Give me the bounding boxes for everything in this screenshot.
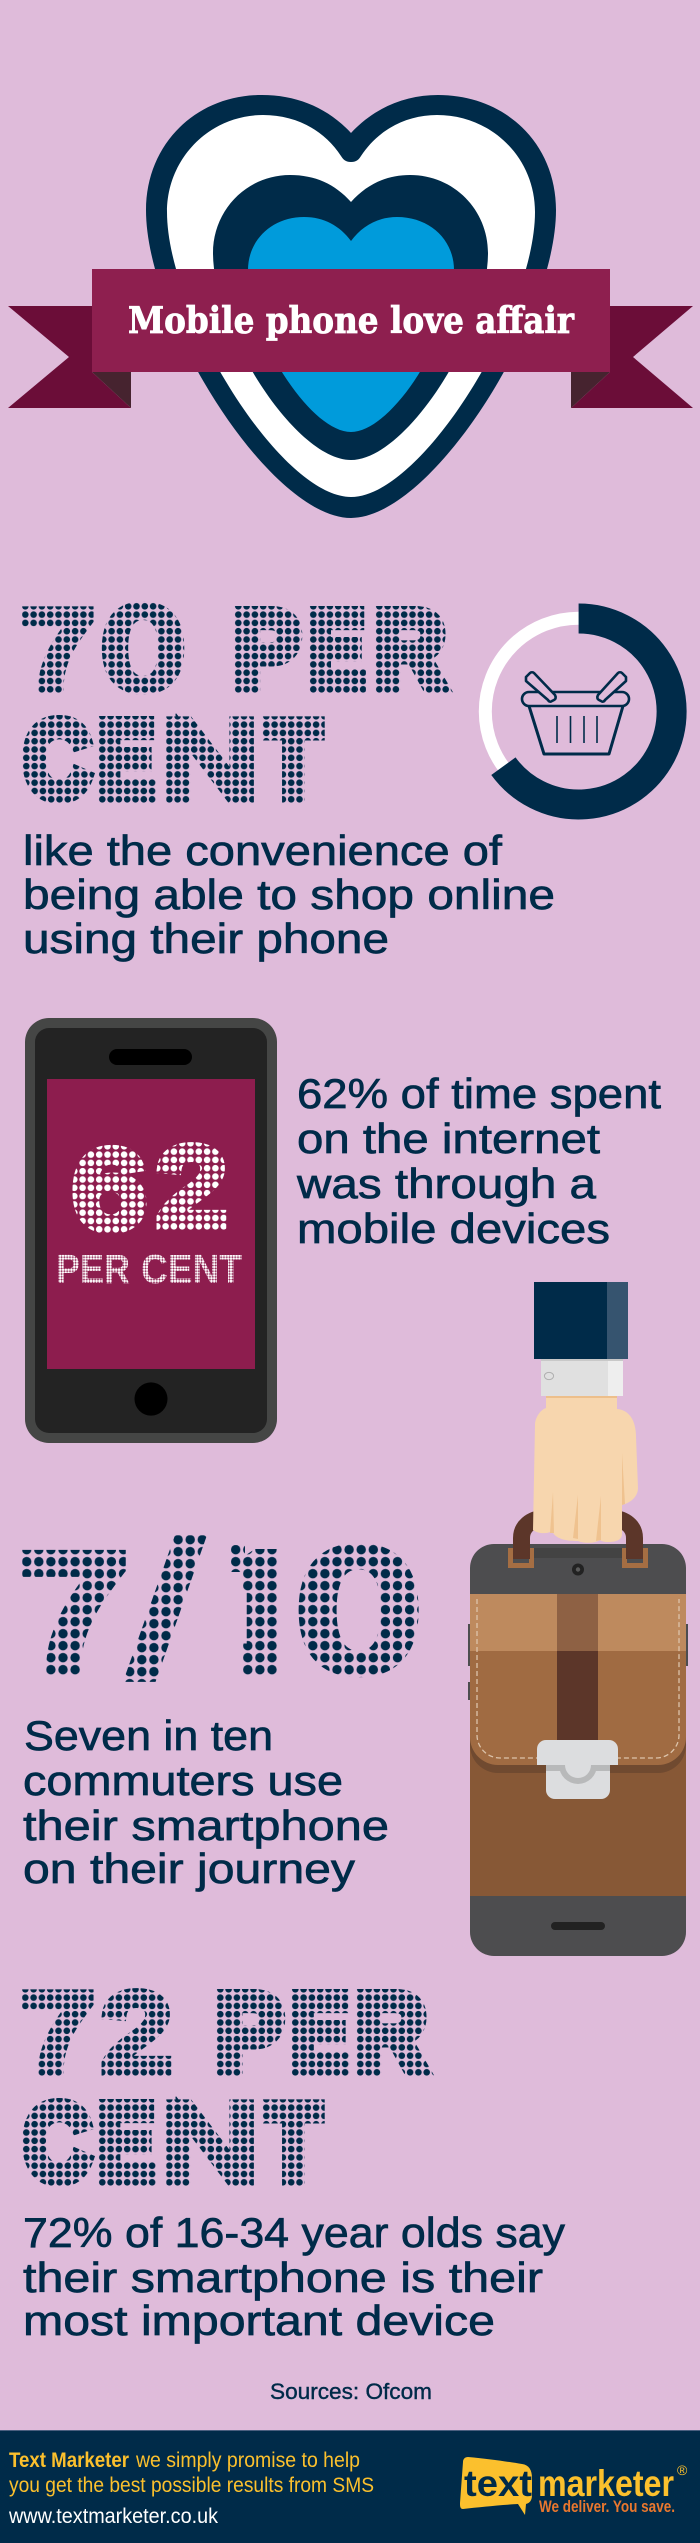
text: 70 per cent description (23, 827, 555, 962)
footer promise text (8, 2449, 374, 2528)
case body (470, 1544, 686, 1956)
phone screen (47, 1079, 255, 1369)
text: 72 per cent description: most important device (23, 2297, 495, 2344)
text: 72 per cent description: 72% of 16-34 year olds say (23, 2209, 565, 2256)
big dotted stat: 7/10 (22, 1535, 419, 1682)
text: 70 per cent description: like the convenience of (23, 827, 502, 874)
text: 72 per cent description: their smartphone is their (23, 2254, 543, 2301)
text: 72 per cent description (23, 2209, 565, 2344)
clasp (537, 1740, 618, 1799)
text: 7/10 description: Seven in ten (24, 1712, 273, 1759)
sources: Sources: Ofcom (270, 2379, 432, 2404)
text: 62 per cent description: was through a (296, 1160, 597, 1207)
text: 7/10 description: on their journey (23, 1845, 355, 1892)
dotted stat: 62 (72, 1142, 226, 1233)
ribbon banner with title (8, 269, 693, 408)
footer promise text: Text Marketer (9, 2449, 129, 2472)
logo: text marketer: marketer (538, 2463, 674, 2504)
icon: shopping basket (522, 672, 629, 754)
logo: text marketer: ® (677, 2462, 688, 2478)
donut chart with basket icon (485, 618, 672, 805)
footer promise text: you get the best possible results from SMS (9, 2474, 374, 2497)
heart emblem (146, 95, 556, 518)
big dotted stat: 70 per cent (22, 601, 454, 803)
text: 62 per cent description (296, 1070, 661, 1252)
text: 70 per cent description: using their phone (23, 915, 389, 962)
logo: text marketer: text (464, 2463, 532, 2504)
text: 62 per cent description: 62% of time spent (297, 1070, 661, 1117)
text: 62 per cent description: on the internet (297, 1115, 600, 1162)
text: 62 per cent description: mobile devices (297, 1205, 610, 1252)
text: 7/10 description: their smartphone (23, 1802, 389, 1849)
hand holding the handle (533, 1282, 638, 1543)
title: Mobile phone love affair (128, 300, 575, 342)
footer (0, 2430, 700, 2543)
text: 70 per cent description: being able to shop online (23, 871, 555, 918)
big dotted stat: 72 per cent (22, 1988, 434, 2186)
footer promise text: www.textmarketer.co.uk (8, 2505, 218, 2528)
phone illustration (25, 1018, 277, 1443)
handle (508, 1548, 648, 1568)
briefcase phone illustration (468, 1518, 688, 1956)
logo: text marketer (460, 2457, 688, 2516)
dotted label: per cent (58, 1254, 242, 1284)
text: 7/10 description (23, 1712, 389, 1892)
footer promise text: we simply promise to help (135, 2449, 360, 2472)
text: 7/10 description: commuters use (23, 1757, 343, 1804)
